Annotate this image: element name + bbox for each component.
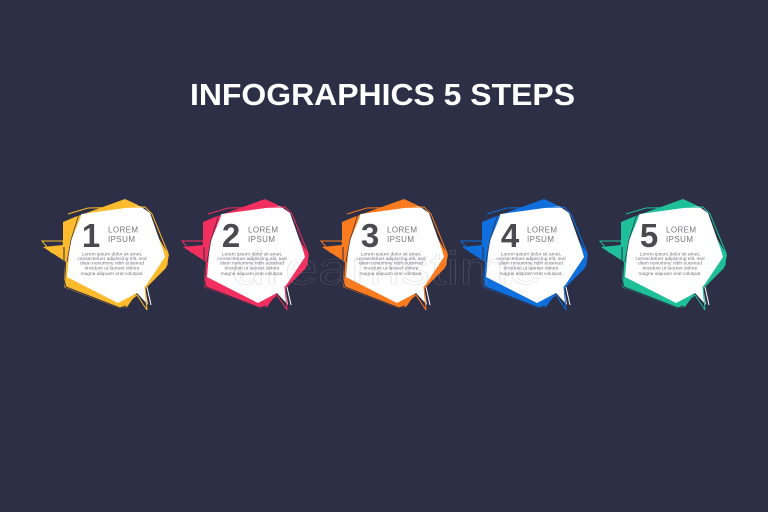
step 5: IPSUM	[666, 235, 693, 244]
step 2: IPSUM	[248, 235, 275, 244]
step 1: LOREM	[108, 226, 138, 234]
step 2: LOREM	[248, 226, 278, 234]
step 1: IPSUM	[108, 235, 135, 244]
step 4: LOREM	[527, 226, 557, 234]
step 5	[600, 199, 727, 310]
step 2: tincidunt ut laoreet dolore	[225, 266, 280, 272]
step 3: LOREM	[387, 226, 417, 234]
step 5: 5	[640, 217, 658, 254]
step 3: magna aliquam erat volutpat.	[359, 271, 423, 277]
step 5: LOREM	[666, 226, 696, 234]
step 4: Lorem ipsum dolor sit amet,	[501, 252, 561, 258]
step 3: Lorem ipsum dolor sit amet,	[361, 252, 421, 258]
step 4: diam nonummy nibh euismod	[499, 260, 563, 266]
step 1: 1	[82, 217, 100, 254]
step 1: consectetuer adipiscing elit, sed	[77, 256, 147, 262]
step 5: tincidunt ut laoreet dolore	[643, 266, 698, 272]
step 1	[42, 199, 169, 310]
step 4: tincidunt ut laoreet dolore	[504, 266, 559, 272]
step 4: magna aliquam erat volutpat.	[499, 271, 563, 277]
step 2: Lorem ipsum dolor sit amet,	[222, 252, 282, 258]
step 3: 3	[361, 217, 379, 254]
title: INFOGRAPHICS 5 STEPS	[190, 77, 575, 112]
step 3: tincidunt ut laoreet dolore	[364, 266, 419, 272]
step 2: 2	[222, 217, 240, 254]
step 5: Lorem ipsum dolor sit amet,	[640, 252, 700, 258]
step 4: IPSUM	[527, 235, 554, 244]
step 3: diam nonummy nibh euismod	[359, 260, 423, 266]
step 2: diam nonummy nibh euismod	[220, 260, 284, 266]
step 3	[321, 199, 448, 310]
step 5: magna aliquam erat volutpat.	[638, 271, 702, 277]
step 5: diam nonummy nibh euismod	[638, 260, 702, 266]
step 4: consectetuer adipiscing elit, sed	[496, 256, 566, 262]
step 1: diam nonummy nibh euismod	[80, 260, 144, 266]
step 2: magna aliquam erat volutpat.	[220, 271, 284, 277]
step 5: consectetuer adipiscing elit, sed	[635, 256, 705, 262]
step 4	[461, 199, 588, 310]
watermark: dreamstime	[232, 242, 542, 294]
step 3: consectetuer adipiscing elit, sed	[356, 256, 426, 262]
step 1: magna aliquam erat volutpat.	[80, 271, 144, 277]
step 2	[182, 199, 309, 310]
step 3: IPSUM	[387, 235, 414, 244]
step 2: consectetuer adipiscing elit, sed	[217, 256, 287, 262]
step 1: tincidunt ut laoreet dolore	[85, 266, 140, 272]
step 4: 4	[501, 217, 520, 254]
step 1: Lorem ipsum dolor sit amet,	[82, 252, 142, 258]
